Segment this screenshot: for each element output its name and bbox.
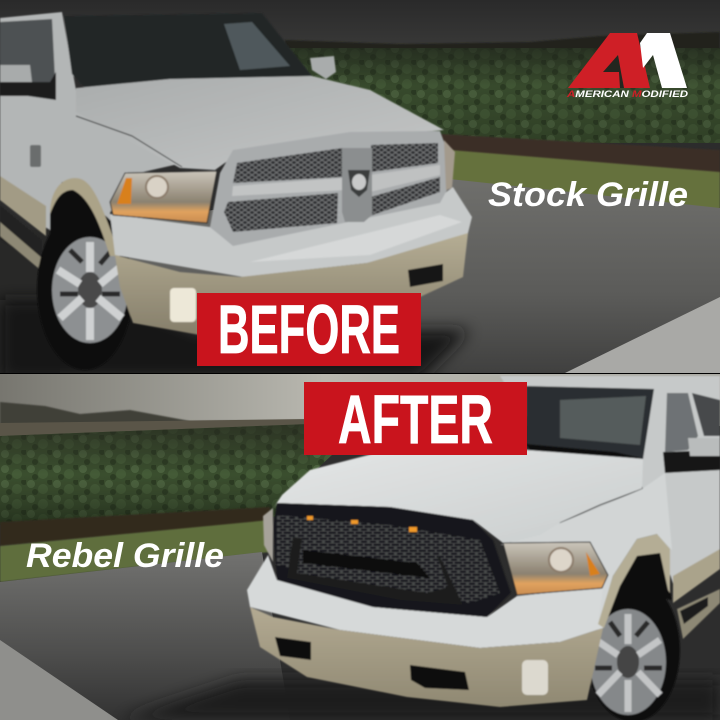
tow hooks <box>275 637 311 660</box>
hood <box>76 76 444 170</box>
inner black frame <box>287 537 463 605</box>
right mirror <box>310 56 336 79</box>
truck cab and door <box>0 11 174 232</box>
panel: after photo <box>0 374 720 720</box>
hood <box>272 450 643 543</box>
chrome grille frame <box>210 131 447 246</box>
rear side window <box>692 393 720 436</box>
truck: stock grille <box>0 12 472 370</box>
outer honeycomb mesh <box>277 515 500 603</box>
fog lamp <box>522 660 548 695</box>
truck: rebel grille <box>247 376 720 720</box>
heading: stock grille: Stock Grille <box>488 176 688 214</box>
side mirror <box>688 438 720 456</box>
running board <box>677 589 720 639</box>
windshield <box>526 386 654 459</box>
tan lower bumper <box>115 233 468 335</box>
tan lower bumper <box>250 607 603 707</box>
front wheel <box>586 578 680 720</box>
running board <box>0 207 44 256</box>
tan fender flare <box>50 178 120 256</box>
background: sky, field and road <box>0 374 720 720</box>
truck shadow <box>0 300 470 380</box>
tan rocker <box>0 176 46 236</box>
windshield <box>64 13 312 88</box>
mirror <box>0 65 32 82</box>
side window <box>665 393 698 452</box>
dark window base <box>663 451 720 473</box>
logo white M <box>640 33 687 88</box>
inner mesh band <box>297 538 448 593</box>
fog lamp <box>170 288 196 322</box>
label: before: BEFORE <box>218 291 400 368</box>
chrome bars <box>232 178 346 196</box>
side marker <box>444 140 455 190</box>
side window <box>0 18 56 84</box>
background: sky, field and road <box>0 0 720 373</box>
logo A cutout <box>603 55 624 88</box>
heading: rebel grille: Rebel Grille <box>26 537 224 575</box>
door badge <box>30 145 41 167</box>
dark window base <box>0 72 56 100</box>
panel: before photo <box>0 0 720 380</box>
wheel arch <box>618 548 672 600</box>
label: before <box>197 291 421 368</box>
tow hook <box>408 264 443 287</box>
logo: American Modified <box>566 33 688 100</box>
headlight <box>110 171 217 223</box>
hood crease <box>560 489 642 523</box>
logo red A <box>568 33 650 88</box>
amber marker lights <box>307 516 417 532</box>
wheel arch <box>49 182 92 233</box>
fender <box>500 473 672 626</box>
hood crease <box>76 116 182 167</box>
label: after: AFTER <box>338 381 493 458</box>
tan rocker <box>673 549 720 603</box>
logo wordmark: AMERICAN MODIFIED <box>566 89 688 100</box>
white bumper <box>110 187 472 277</box>
white bumper <box>247 555 609 648</box>
ram badge <box>342 148 372 222</box>
windshield reflection <box>224 22 290 70</box>
roof and cab <box>500 376 720 590</box>
center slot <box>303 550 430 578</box>
headlight <box>503 542 608 595</box>
grille mesh <box>224 143 440 232</box>
tan fender flare <box>598 534 670 628</box>
left headlight edge <box>263 508 273 562</box>
black rebel grille <box>273 503 511 617</box>
front wheel <box>37 208 133 370</box>
